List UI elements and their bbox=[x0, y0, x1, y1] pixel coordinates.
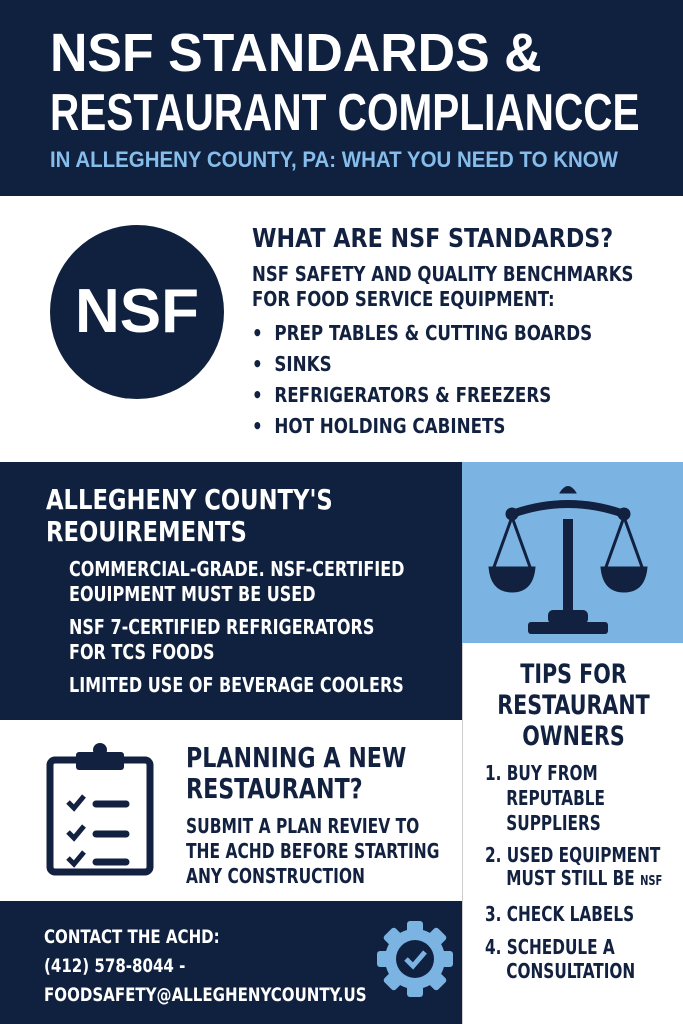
heading: PLANNING A NEW bbox=[186, 741, 406, 774]
panel: requirements bbox=[0, 462, 462, 720]
heading: REOUIREMENTS bbox=[46, 515, 247, 548]
contact text: CONTACT THE ACHD: bbox=[44, 926, 220, 948]
heading bbox=[186, 741, 406, 805]
icon: NSF logo bbox=[50, 225, 224, 399]
description bbox=[186, 814, 439, 888]
contact text bbox=[44, 926, 367, 1006]
requirements list: NSF 7-CERTIFIED REFRIGERATORS bbox=[69, 615, 374, 639]
header panel bbox=[0, 0, 683, 196]
heading bbox=[46, 483, 333, 548]
section: planning a new restaurant bbox=[186, 741, 439, 888]
description: ANY CONSTRUCTION bbox=[186, 864, 365, 888]
subtitle: IN ALLEGHENY COUNTY, PA: WHAT YOU NEED TO KNOW bbox=[50, 147, 618, 172]
icon: gear check bbox=[377, 921, 453, 997]
contact text: (412) 578-8044 - bbox=[44, 955, 185, 977]
requirements list: EOUIPMENT MUST BE USED bbox=[69, 582, 315, 606]
title: RESTAURANT COMPLIANCCE bbox=[50, 84, 640, 142]
icon: NSF logo: NSF bbox=[75, 277, 199, 346]
tips list: REPUTABLE bbox=[506, 786, 605, 810]
requirements list: FOR TCS FOODS bbox=[69, 640, 215, 664]
panel: contact bbox=[0, 901, 462, 1024]
description bbox=[252, 262, 633, 311]
tips list: MUST STILL BE NSF bbox=[506, 866, 662, 890]
title bbox=[50, 23, 640, 142]
icon: scales panel bbox=[462, 462, 683, 643]
description: THE ACHD BEFORE STARTING bbox=[186, 839, 439, 863]
heading: ALLEGHENY COUNTY'S bbox=[46, 483, 333, 516]
tips list: SUPPLIERS bbox=[506, 811, 601, 835]
description: NSF SAFETY AND QUALITY BENCHMARKS bbox=[252, 262, 633, 286]
heading bbox=[497, 659, 650, 752]
bullet list bbox=[252, 321, 592, 438]
bullet list: • SINKS bbox=[252, 352, 332, 376]
icon: clipboard bbox=[46, 743, 154, 876]
heading: TIPS FOR bbox=[520, 659, 627, 690]
requirements list: LIMITED USE OF BEVERAGE COOLERS bbox=[69, 673, 404, 697]
section: what are NSF standards bbox=[252, 224, 633, 438]
panel: tips bbox=[462, 643, 683, 1024]
tips list bbox=[485, 761, 662, 983]
bullet list: • PREP TABLES & CUTTING BOARDS bbox=[252, 321, 592, 345]
tips list: 3. CHECK LABELS bbox=[485, 902, 634, 926]
bullet list: • HOT HOLDING CABINETS bbox=[252, 414, 505, 438]
tips list: 1. BUY FROM bbox=[485, 761, 598, 785]
bullet list: • REFRIGERATORS & FREEZERS bbox=[252, 383, 551, 407]
description: FOR FOOD SERVICE EQUIPMENT: bbox=[252, 287, 555, 311]
tips list: 4. SCHEDULE A bbox=[485, 935, 615, 959]
tips list: CONSULTATION bbox=[506, 959, 635, 983]
requirements list: COMMERCIAL-GRADE. NSF-CERTIFIED bbox=[69, 557, 404, 581]
heading: RESTAURANT? bbox=[186, 772, 363, 805]
description: SUBMIT A PLAN REVIEV TO bbox=[186, 814, 419, 838]
heading: WHAT ARE NSF STANDARDS? bbox=[252, 224, 613, 254]
heading: OWNERS bbox=[522, 721, 625, 752]
requirements list bbox=[69, 557, 404, 697]
tips list: 2. USED EQUIPMENT bbox=[485, 843, 660, 867]
heading: RESTAURANT bbox=[497, 690, 650, 721]
title: NSF STANDARDS & bbox=[50, 23, 542, 83]
contact text: FOODSAFETY@ALLEGHENYCOUNTY.US bbox=[44, 984, 367, 1006]
